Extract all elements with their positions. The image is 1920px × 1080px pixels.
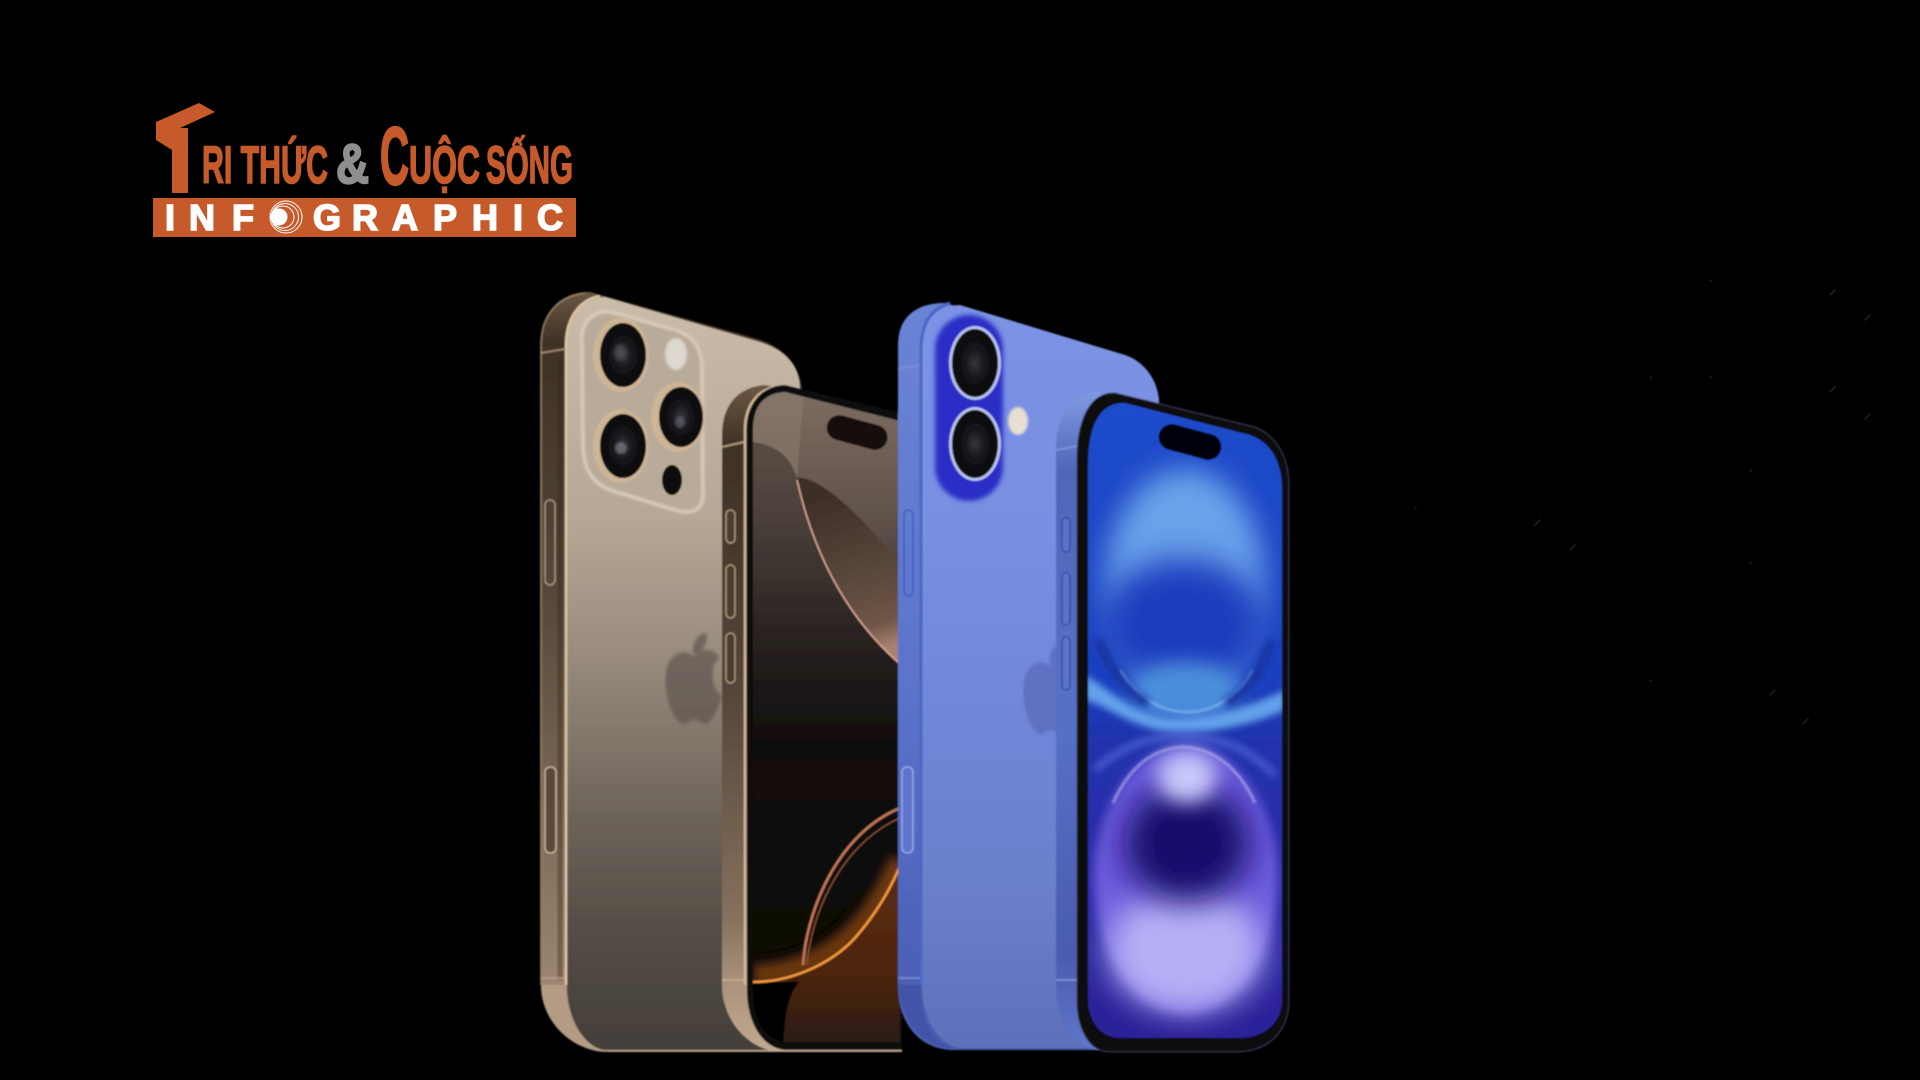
orange arcs and glow: [753, 860, 900, 975]
upper bowl shade: [1099, 559, 1267, 691]
logo wordmark: UỘC: [409, 134, 480, 195]
dynamic island: [1156, 421, 1224, 463]
frame: [1056, 392, 1120, 1052]
back glass: [922, 305, 1159, 1048]
phone: ultramarine iPhone back: [898, 303, 1159, 1050]
camera plateau: [582, 312, 703, 512]
lens right: [651, 382, 705, 452]
frame: [722, 385, 902, 1052]
wing band: [1085, 675, 1285, 732]
phones group: [541, 292, 1289, 1052]
faint background specks: [1415, 280, 1870, 724]
lens upper: [949, 326, 1001, 400]
apple logo ghost: [665, 633, 722, 724]
lidar sensor: [662, 465, 682, 495]
black bezel: [1077, 393, 1289, 1052]
logo wordmark: C: [380, 111, 409, 202]
dynamic island: [824, 412, 890, 453]
lens bottom: [593, 409, 649, 483]
phone: natural titanium iPhone Pro front: [722, 385, 902, 1052]
logo: Tri Thức & Cuộc Sống Infographic: [153, 103, 576, 238]
phone: natural titanium iPhone Pro back: [541, 292, 802, 1052]
logo icon: roof-shaped T: [156, 103, 215, 193]
wallpaper lens shape: [797, 478, 900, 664]
frame side band: [898, 303, 1159, 1050]
side buttons: [1062, 518, 1070, 690]
wallpaper: [1085, 400, 1285, 1040]
flash: [665, 338, 687, 370]
back glass: [567, 297, 800, 1050]
frame side band: [541, 292, 802, 1052]
logo wordmark: RI THỨC: [202, 135, 328, 195]
side buttons: [904, 510, 913, 596]
lower bubble: [1095, 736, 1275, 775]
black bezel: [747, 385, 902, 1050]
upper bowl glow: [1105, 469, 1265, 701]
apple logo ghost: [1023, 643, 1077, 734]
logo wordmark: &: [336, 132, 369, 195]
phone: ultramarine iPhone front: [1056, 392, 1289, 1052]
lens top: [593, 318, 649, 392]
logo wordmark: [202, 111, 573, 202]
flash: [1008, 407, 1028, 435]
side buttons: [545, 500, 555, 585]
logo banner: INFOGRAPHIC: INF O GRAPHIC: [165, 197, 563, 238]
wallpaper: [750, 385, 902, 1045]
lens lower: [949, 407, 1001, 481]
side buttons: [726, 510, 735, 683]
camera plateau: [935, 315, 1003, 501]
logo wordmark: SỐNG: [486, 135, 573, 195]
infographic canvas: [153, 103, 1871, 1054]
